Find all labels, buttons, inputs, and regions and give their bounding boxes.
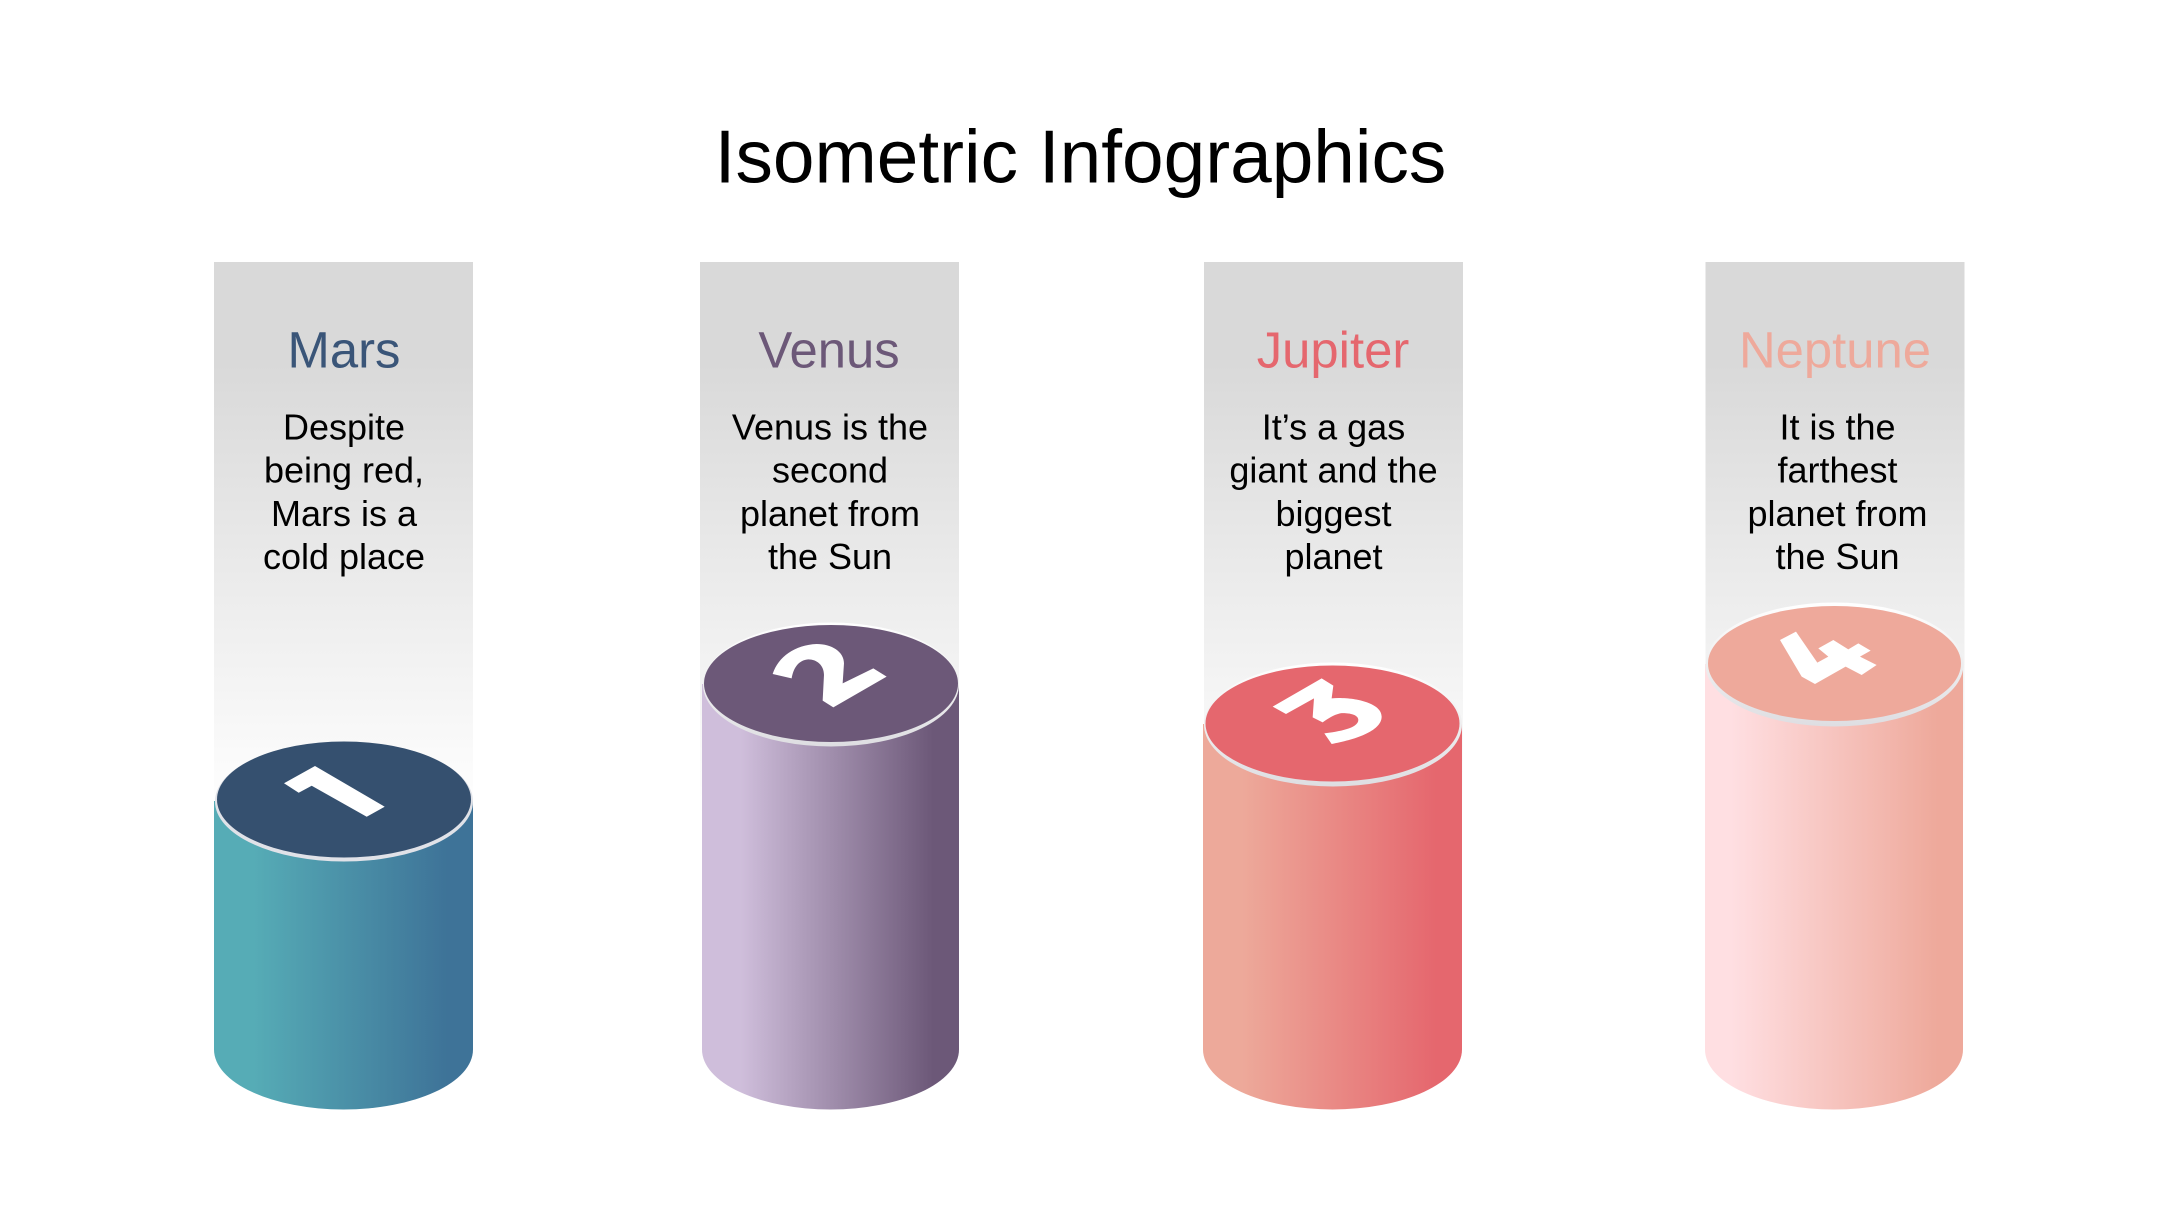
cylinder: Mars xyxy=(214,742,473,1110)
text block: Mars description: Mars is a xyxy=(271,493,418,534)
icon: number 1 xyxy=(284,766,385,817)
cylinder: Neptune xyxy=(1705,602,1964,1110)
icon: number 4 xyxy=(1780,632,1877,684)
heading: Mars: Mars xyxy=(288,322,400,378)
panel background: Jupiter xyxy=(1204,262,1463,1112)
text block: Venus description: Venus is the xyxy=(732,406,928,448)
text block: Mars description: cold place xyxy=(263,536,425,577)
heading: Neptune: Neptune xyxy=(1739,322,1931,378)
text block: Jupiter description: It’s a gas xyxy=(1262,406,1405,448)
heading: Jupiter: Jupiter xyxy=(1257,322,1409,378)
cylinder: Jupiter xyxy=(1203,662,1462,1109)
text block: Mars description: being red, xyxy=(264,450,424,491)
text block: Jupiter description: planet xyxy=(1284,536,1383,577)
text block: Venus description: second xyxy=(772,450,888,491)
panel: Mars xyxy=(214,262,473,1112)
text block: Jupiter description: biggest xyxy=(1275,493,1392,534)
heading: Venus: Venus xyxy=(758,322,900,378)
text block: Neptune description: farthest xyxy=(1777,450,1898,491)
panel: Neptune xyxy=(1705,262,1964,1112)
icon: number 2 xyxy=(773,644,887,707)
text block: Mars description: Despite xyxy=(283,406,405,448)
text block: Neptune description: the Sun xyxy=(1775,536,1900,577)
panel background: Venus xyxy=(700,262,959,1112)
panel background: Neptune xyxy=(1706,262,1964,1112)
text block: Venus description: planet from xyxy=(740,493,920,534)
text block: Venus description: the Sun xyxy=(768,536,892,577)
text block: Neptune description: planet from xyxy=(1747,493,1928,534)
cylinder: Venus xyxy=(702,622,959,1110)
text block: Neptune description: It is the xyxy=(1779,406,1896,448)
panel background: Mars xyxy=(214,262,473,1112)
panel: Venus xyxy=(700,262,959,1112)
text block: Jupiter description: giant and the xyxy=(1229,450,1438,491)
panel: Jupiter xyxy=(1203,262,1463,1112)
title: Isometric Infographics xyxy=(715,114,1446,198)
icon: number 3 xyxy=(1273,678,1382,744)
